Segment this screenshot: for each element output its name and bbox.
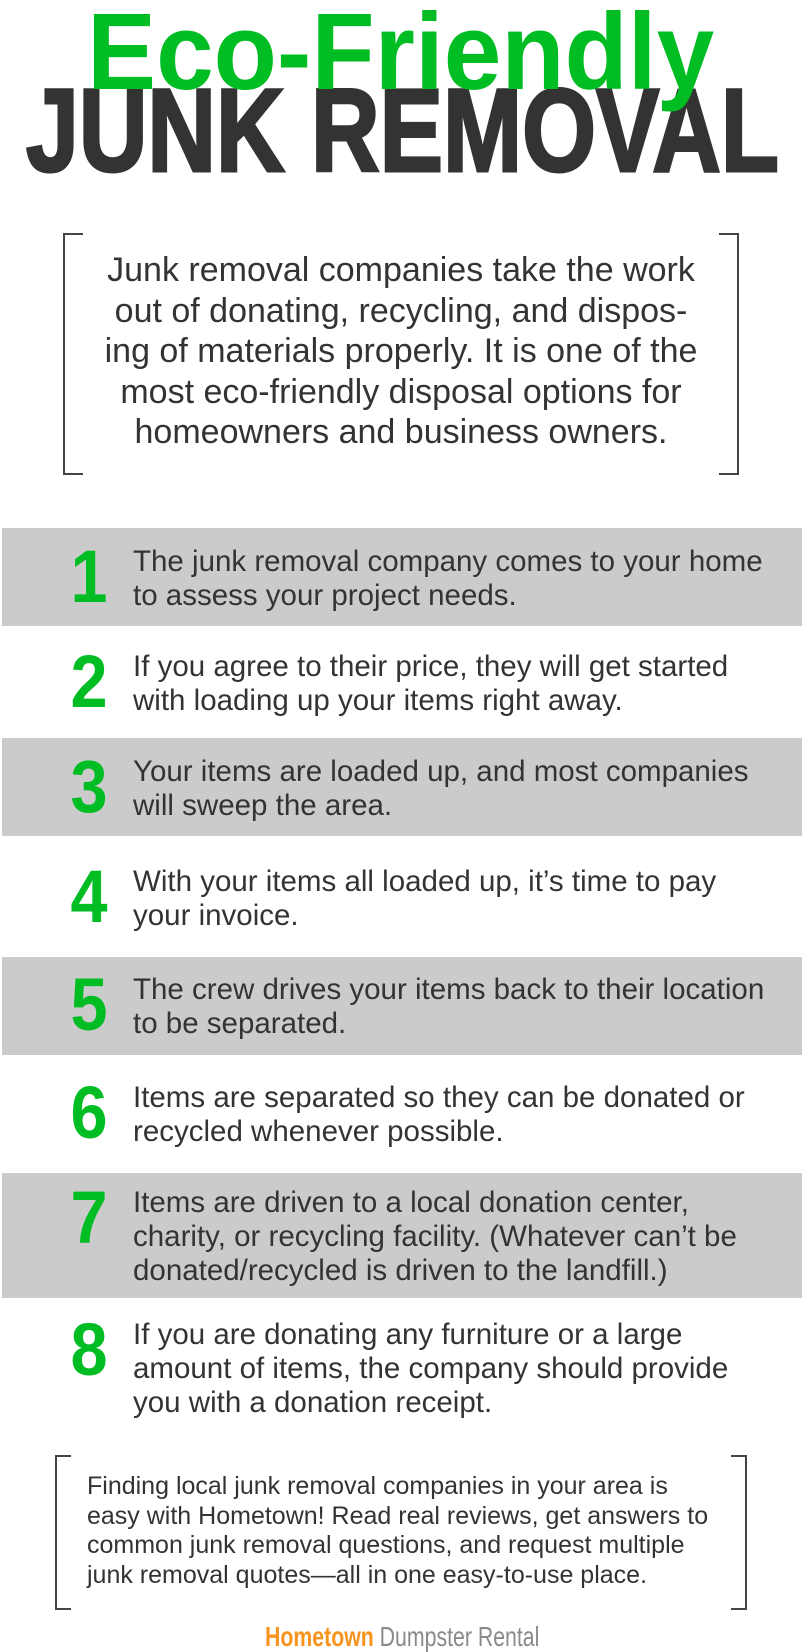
intro bracketed text: most eco-friendly disposal options for bbox=[120, 372, 682, 410]
step 4: 4 bbox=[70, 855, 108, 938]
step 6: recycled whenever possible. bbox=[133, 1115, 504, 1148]
step 7: Items are driven to a local donation center, bbox=[133, 1186, 689, 1219]
step 3: Your items are loaded up, and most companies bbox=[133, 755, 748, 788]
intro bracketed text: homeowners and business owners. bbox=[135, 413, 667, 451]
step 3 bbox=[70, 745, 748, 828]
step 8: amount of items, the company should provide bbox=[133, 1352, 728, 1385]
step 4 bbox=[70, 855, 716, 938]
step 7: donated/recycled is driven to the landfill.) bbox=[133, 1254, 668, 1287]
logo: Hometown Dumpster Rental: Hometown Dumpster Rental bbox=[265, 1621, 539, 1652]
closing bracketed callout: Finding local junk removal companies in your area is bbox=[87, 1472, 668, 1500]
step 8 bbox=[70, 1308, 728, 1419]
step 8: you with a donation receipt. bbox=[133, 1386, 492, 1419]
step 4: With your items all loaded up, it’s time to pay bbox=[133, 865, 716, 898]
closing bracketed callout: easy with Hometown! Read real reviews, get answers to bbox=[87, 1502, 708, 1530]
step 1: The junk removal company comes to your home bbox=[133, 545, 763, 578]
step 3: will sweep the area. bbox=[133, 789, 392, 822]
step 8: If you are donating any furniture or a large bbox=[133, 1318, 682, 1351]
step 1: 1 bbox=[70, 535, 108, 618]
title: JUNK REMOVAL: JUNK REMOVAL bbox=[26, 65, 779, 197]
step 7: 7 bbox=[70, 1176, 108, 1259]
step 8: 8 bbox=[70, 1308, 108, 1391]
step 6: 6 bbox=[70, 1071, 108, 1154]
closing bracketed callout: common junk removal questions, and request multiple bbox=[87, 1531, 685, 1559]
step 2: 2 bbox=[70, 640, 108, 723]
step 6 bbox=[70, 1071, 745, 1154]
intro bracketed text: ing of materials properly. It is one of the bbox=[105, 332, 697, 370]
intro bracketed text bbox=[63, 233, 739, 475]
step 3: 3 bbox=[70, 745, 108, 828]
step 4: your invoice. bbox=[133, 899, 299, 932]
step 7: charity, or recycling facility. (Whatever can’t be bbox=[133, 1220, 737, 1253]
step 5 bbox=[70, 963, 764, 1046]
step 1 bbox=[70, 535, 763, 618]
intro bracketed text: Junk removal companies take the work bbox=[107, 251, 695, 289]
step 7 bbox=[70, 1176, 737, 1287]
step 2 bbox=[70, 640, 728, 723]
intro bracketed text: out of donating, recycling, and dispos- bbox=[115, 292, 687, 330]
closing bracketed callout bbox=[55, 1455, 747, 1610]
step 5: The crew drives your items back to their location bbox=[133, 973, 764, 1006]
closing bracketed callout: junk removal quotes—all in one easy-to-use place. bbox=[87, 1560, 647, 1588]
step 1: to assess your project needs. bbox=[133, 579, 517, 612]
step 5: to be separated. bbox=[133, 1007, 346, 1040]
step 6: Items are separated so they can be donated or bbox=[133, 1081, 745, 1114]
step 2: with loading up your items right away. bbox=[133, 684, 623, 717]
step 2: If you agree to their price, they will get started bbox=[133, 650, 728, 683]
step 5: 5 bbox=[70, 963, 108, 1046]
